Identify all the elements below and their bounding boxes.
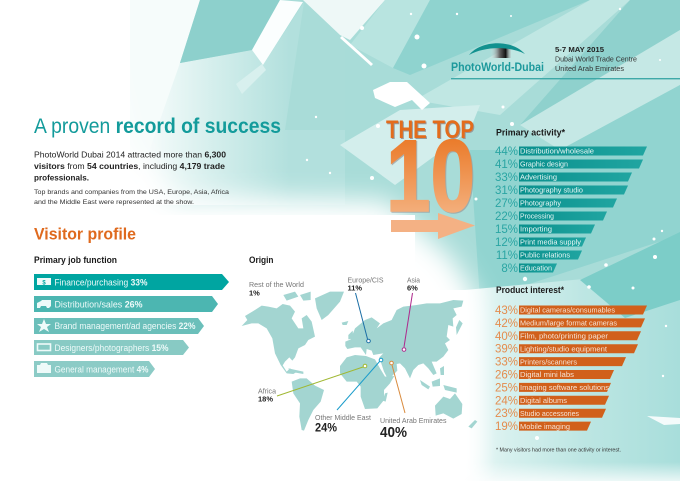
- bar list: primary activity: 8%: [501, 263, 518, 275]
- primary activity heading: Primary activity*: [496, 128, 565, 138]
- bar list: primary activity: 33%: [495, 172, 518, 184]
- callout: Europe/CIS: 11%: [348, 284, 362, 292]
- callout: Asia: 6%: [407, 284, 418, 292]
- intro text block: and the Middle East were represented at the show.: [34, 199, 194, 206]
- origin heading: Origin: [249, 255, 274, 266]
- bar list: product interest: 40%: [495, 331, 518, 343]
- bar list: primary activity: Photography: [520, 199, 561, 208]
- bar list: primary activity: Public relations: [520, 251, 570, 260]
- bar list: primary activity: Education: [520, 264, 552, 273]
- label: rest of the world: [249, 280, 304, 298]
- event details: [555, 45, 637, 73]
- bar: distribution: Distribution/sales 26%: [54, 300, 142, 310]
- logo wordmark: PhotoWorld-Dubai: [451, 60, 544, 74]
- callout: Europe/CIS: Europe/CIS: [348, 276, 384, 284]
- callout: Europe/CIS: [348, 276, 384, 343]
- heading: Visitor profile: Visitor profile: [34, 224, 136, 244]
- bar list: primary activity: Distribution/wholesale: [520, 147, 594, 156]
- bar list: primary activity: 27%: [495, 198, 518, 210]
- job function heading: Primary job function: [34, 255, 117, 266]
- bar: brand management: Brand management/ad agencies 22%: [54, 321, 195, 331]
- intro text block: [34, 150, 229, 206]
- callout: Other Middle East: [315, 358, 383, 434]
- intro text block: Top brands and companies from the USA, Europe, Asia, Africa: [34, 189, 229, 196]
- bar list: product interest: Digital albums: [520, 396, 567, 405]
- panel: origin map: [242, 255, 477, 441]
- bar list: product interest: 42%: [495, 318, 518, 330]
- callout: Africa: [258, 364, 367, 404]
- bar list: product interest: Mobile imaging: [520, 422, 570, 431]
- bar: distribution: [34, 296, 218, 312]
- bar list: product interest: 25%: [495, 382, 518, 394]
- bar list: product interest: Digital cameras/consumables: [520, 306, 615, 315]
- bar list: product interest: Film, photo/printing paper: [520, 332, 609, 340]
- intro text block: PhotoWorld Dubai 2014 attracted more than 6,300: [34, 150, 226, 160]
- bar list: product interest: Printers/scanners: [520, 357, 577, 366]
- event details: Dubai World Trade Centre: [555, 54, 637, 64]
- label: rest of the world: Rest of the World: [249, 280, 304, 289]
- bar: finance: $: [42, 280, 46, 286]
- callout: Other Middle East: 24%: [315, 422, 337, 434]
- bar list: product interest: 19%: [495, 421, 518, 433]
- bar list: product interest: 24%: [495, 395, 518, 407]
- bar list: product interest: 23%: [495, 408, 518, 420]
- bar list: product interest: Digital mini labs: [520, 370, 574, 379]
- world map: [242, 292, 477, 431]
- callout: Africa: Africa: [258, 386, 277, 396]
- big number 10: 10: [386, 119, 475, 233]
- icon: eye arc: [469, 43, 525, 58]
- bar list: primary activity: Graphic design: [520, 160, 568, 169]
- the top 10 graphic: [386, 116, 476, 239]
- callout: United Arab Emirates: 40%: [380, 425, 407, 441]
- panel: product interest: [495, 285, 647, 454]
- bar list: product interest: [495, 305, 647, 433]
- bar: finance: [34, 274, 229, 290]
- callout: Africa: 18%: [258, 394, 273, 404]
- bar list: primary activity: [495, 146, 647, 275]
- bar list: product interest: Imaging software solutions: [520, 383, 609, 392]
- label: rest of the world: 1%: [249, 288, 260, 298]
- bar list: primary activity: 11%: [496, 250, 518, 262]
- bar list: primary activity: Advertising: [520, 173, 557, 182]
- big number 10: 10: [387, 120, 476, 234]
- arrow: [391, 213, 475, 239]
- bar: designers: [34, 340, 189, 355]
- bar list: primary activity: Processing: [520, 212, 554, 221]
- bar: general management: General management 4%: [54, 364, 148, 374]
- bar list: product interest: 39%: [495, 344, 518, 356]
- panel: primary activity: [495, 128, 647, 275]
- bar list: product interest: Studio accessories: [520, 409, 579, 418]
- bar list: primary activity: 41%: [495, 159, 518, 171]
- bar list: product interest: 26%: [495, 370, 518, 382]
- bar list: primary activity: Print media supply: [520, 238, 581, 247]
- callout: Other Middle East: Other Middle East: [315, 413, 372, 422]
- sparkles: [306, 8, 667, 440]
- product interest heading: Product interest*: [496, 285, 564, 296]
- bar list: product interest: Lighting/studio equipment: [520, 344, 608, 353]
- heading: THE TOP: THE TOP: [386, 116, 474, 144]
- callout: Asia: [402, 276, 421, 351]
- bar list: primary activity: 31%: [495, 185, 518, 197]
- bar list: primary activity: 44%: [495, 146, 518, 158]
- panel: primary job function: [34, 255, 229, 377]
- bar: finance: Finance/purchasing 33%: [54, 278, 148, 288]
- bar list: primary activity: 22%: [495, 211, 518, 223]
- bar list: product interest: 43%: [495, 305, 518, 317]
- callout: United Arab Emirates: [380, 361, 447, 441]
- callout: United Arab Emirates: United Arab Emirates: [380, 416, 447, 425]
- bar list: primary activity: 12%: [495, 237, 518, 249]
- bar: brand management: [34, 318, 204, 334]
- white fade over the left side: [0, 0, 478, 481]
- bar: designers: Designers/photographers 15%: [54, 343, 168, 353]
- event details: United Arab Emirates: [555, 64, 624, 73]
- title: A proven record of success: [34, 115, 281, 138]
- bar list: product interest: Medium/large format cameras: [520, 319, 617, 328]
- heading: THE TOP: THE TOP: [387, 117, 475, 145]
- bar list: primary activity: 15%: [495, 224, 518, 236]
- footnote: * Many visitors had more than one activity or interest.: [496, 448, 621, 454]
- callout: Asia: Asia: [407, 276, 421, 284]
- bar list: product interest: 33%: [495, 357, 518, 369]
- event details: 5-7 MAY 2015: [555, 45, 604, 54]
- intro text block: professionals.: [34, 174, 89, 182]
- bar list: primary activity: Importing: [520, 225, 552, 234]
- bar list: primary activity: Photography studio: [520, 186, 583, 195]
- intro text block: visitors from 54 countries , including 4,179 trade: [34, 162, 225, 171]
- bar: general management: [34, 361, 155, 377]
- logo: PhotoWorld-Dubai: [451, 43, 544, 74]
